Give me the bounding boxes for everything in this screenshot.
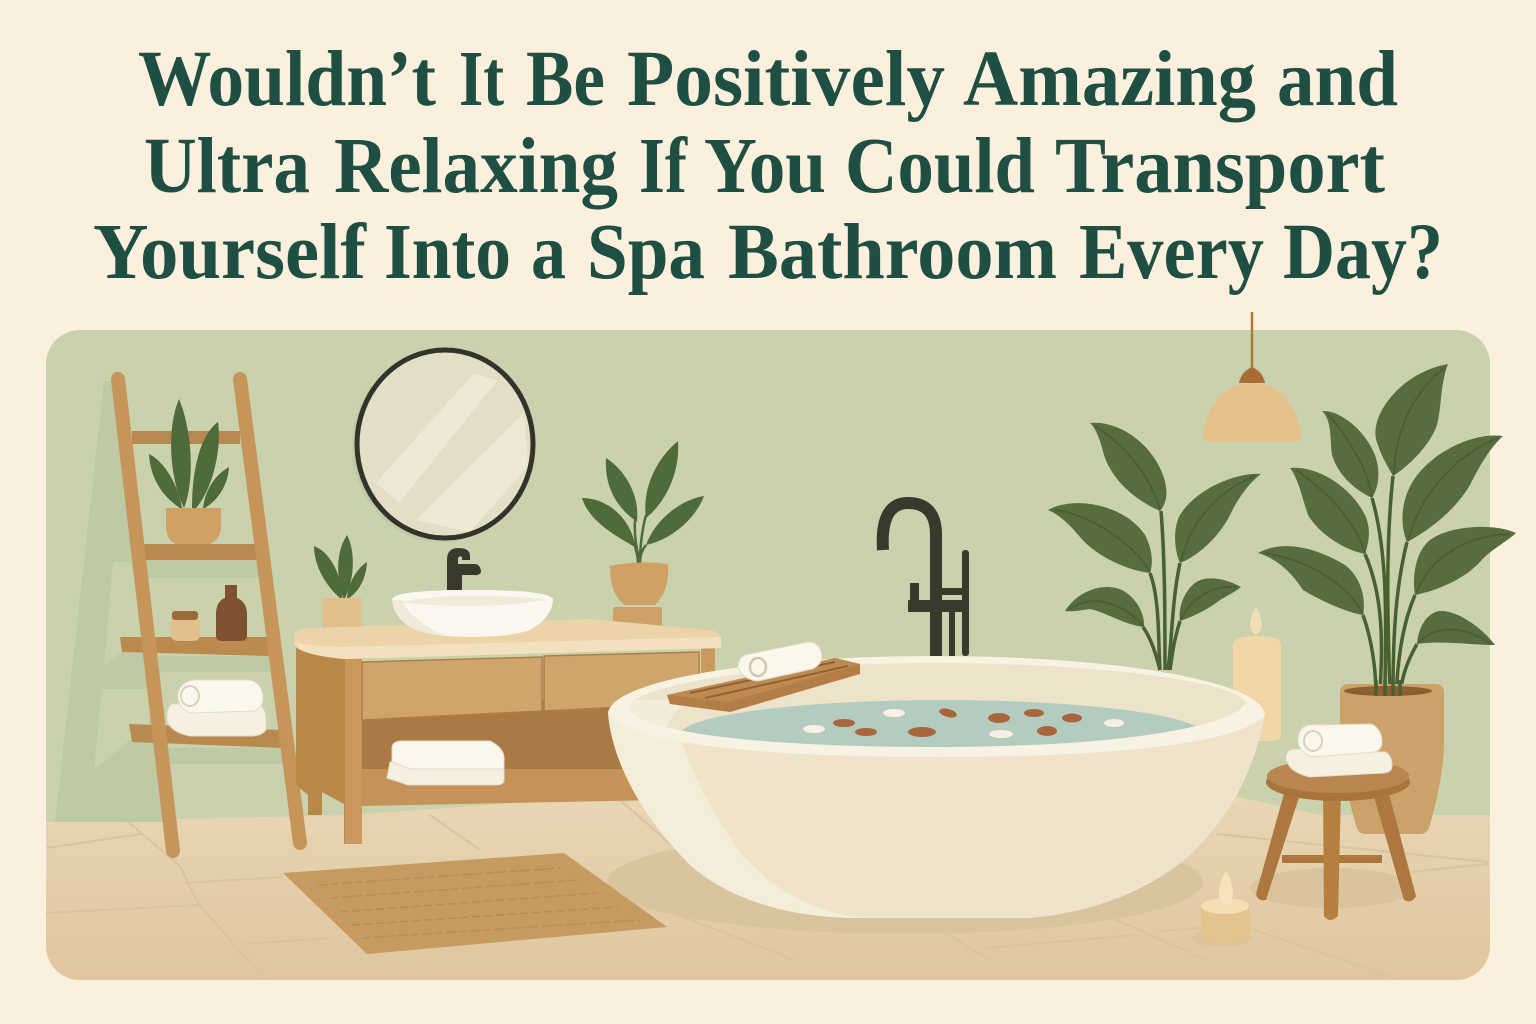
stems in pot bbox=[1376, 680, 1400, 696]
title: It bbox=[459, 36, 504, 123]
bottom shelf bbox=[360, 769, 660, 806]
title: Wouldn’t bbox=[138, 36, 436, 123]
veins bbox=[1265, 368, 1510, 644]
bathtub bbox=[608, 656, 1265, 918]
rails bbox=[118, 379, 300, 851]
title: Into bbox=[384, 209, 511, 296]
stems bbox=[1363, 476, 1417, 695]
stems bbox=[1143, 511, 1180, 670]
wall bbox=[46, 330, 1490, 980]
open shelf interior bbox=[360, 700, 710, 772]
mirror bbox=[352, 350, 533, 542]
title: Ultra bbox=[144, 123, 310, 210]
floor bbox=[46, 795, 1490, 980]
shelf towels bbox=[167, 680, 266, 736]
leaves bbox=[1048, 423, 1261, 627]
stool bbox=[1256, 759, 1416, 920]
vanity towels bbox=[387, 741, 504, 785]
pendant lamp bbox=[1203, 312, 1301, 442]
leaves bbox=[1258, 364, 1516, 645]
front leg bbox=[345, 655, 362, 844]
pillar candle bbox=[1233, 607, 1281, 741]
bath tray bbox=[667, 658, 860, 712]
title: You bbox=[704, 123, 826, 210]
rim bbox=[608, 656, 1265, 757]
small vanity plant bbox=[314, 535, 367, 632]
right leg bbox=[701, 645, 715, 705]
vanity bbox=[294, 619, 721, 844]
drawer left bbox=[362, 657, 542, 720]
title: Amazing bbox=[963, 36, 1256, 123]
title: Relaxing bbox=[334, 123, 618, 210]
shelves bbox=[120, 431, 282, 748]
water bbox=[682, 700, 1196, 747]
plant: back right bbox=[1048, 423, 1261, 670]
ladder shelf bbox=[118, 379, 300, 851]
title: If bbox=[639, 123, 688, 210]
cabinet side bbox=[296, 644, 362, 844]
veins bbox=[1055, 426, 1255, 626]
vessel sink bbox=[392, 590, 553, 637]
bath faucet bbox=[883, 503, 969, 656]
stool floor shadow bbox=[1250, 868, 1414, 908]
title: Bathroom bbox=[728, 209, 1057, 296]
vanity plant bbox=[582, 441, 704, 628]
drawer right bbox=[544, 652, 699, 711]
tub floor shadow bbox=[607, 849, 1203, 934]
ladder wall shadow bbox=[55, 381, 288, 822]
tea light bbox=[1192, 871, 1252, 947]
title bbox=[93, 36, 1443, 296]
vanity faucet bbox=[447, 548, 481, 590]
floor pot bbox=[1340, 684, 1444, 834]
title: and bbox=[1277, 36, 1398, 123]
title: Spa bbox=[587, 209, 705, 296]
plant: floor right bbox=[1258, 364, 1516, 834]
body highlight bbox=[608, 713, 860, 918]
title: Be bbox=[526, 36, 605, 123]
title: Transport bbox=[1055, 123, 1385, 210]
title: Yourself bbox=[93, 209, 368, 296]
title: Day? bbox=[1283, 209, 1443, 296]
shelf jar and bottle bbox=[171, 585, 247, 641]
tray towel bbox=[738, 642, 822, 681]
shelf plant bbox=[149, 399, 229, 544]
stool towels bbox=[1286, 724, 1392, 777]
title: Every bbox=[1079, 209, 1264, 296]
tub interior bbox=[628, 663, 1246, 747]
title: Positively bbox=[627, 36, 945, 123]
tub body bbox=[608, 713, 1265, 918]
title: Could bbox=[845, 123, 1035, 210]
petals bbox=[833, 707, 1082, 737]
panel: bathroom scene bbox=[46, 312, 1516, 980]
title: a bbox=[531, 209, 566, 296]
bath mat bbox=[283, 853, 667, 954]
countertop bbox=[294, 619, 721, 659]
